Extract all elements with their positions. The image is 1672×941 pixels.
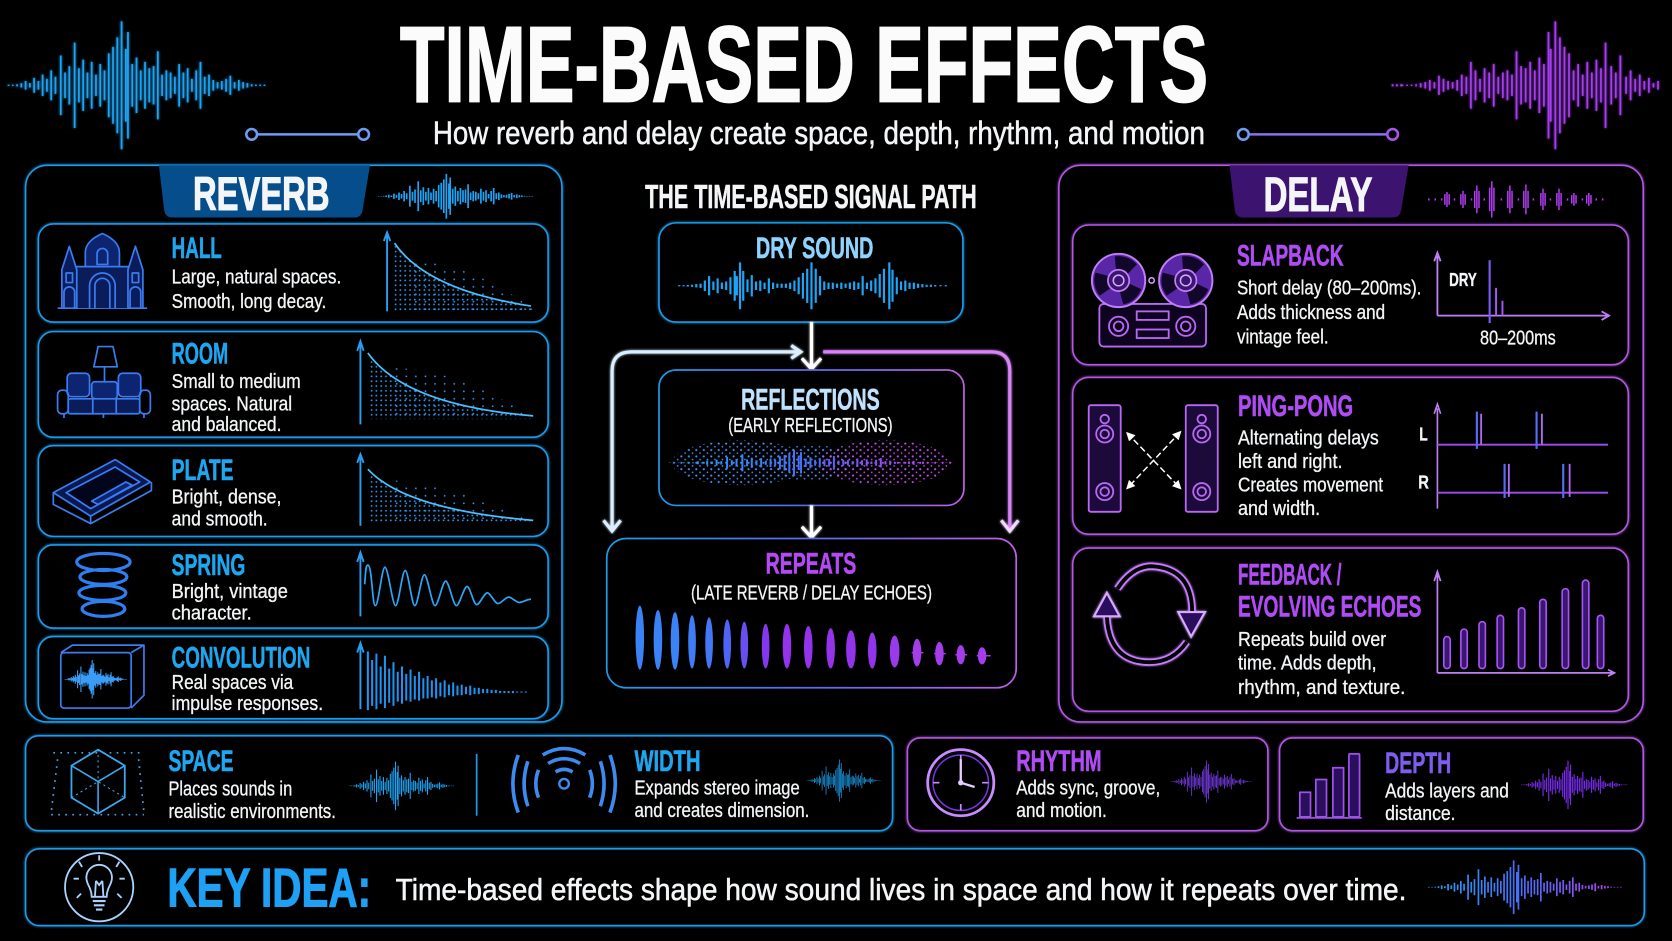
description: spring: character. — [172, 603, 252, 625]
waveform: key idea — [1429, 860, 1621, 914]
panel: reverb — [26, 165, 562, 722]
waveform: top left — [9, 21, 264, 149]
description: spring — [172, 581, 288, 625]
description: hall: Large, natural spaces. — [172, 267, 341, 289]
description: rhythm: and motion. — [1016, 800, 1107, 822]
description: hall: Smooth, long decay. — [172, 291, 326, 313]
description: convolution — [172, 672, 323, 715]
chart: ping-pong: R — [1418, 472, 1429, 492]
waveform: width — [807, 759, 880, 802]
box: repeats: (LATE REVERB / DELAY ECHOES) — [691, 582, 932, 604]
heading: plate: PLATE — [172, 454, 234, 487]
chart: convolution — [357, 643, 526, 710]
waveform: dry — [679, 262, 946, 309]
description: space: Places sounds in — [168, 778, 292, 800]
arrow: reflections to repeats — [802, 505, 821, 537]
card: convolution — [38, 637, 548, 719]
box: dry sound — [659, 223, 963, 322]
description: ping-pong: Alternating delays — [1238, 428, 1379, 450]
icon: convolution — [61, 645, 144, 708]
icon: sofa — [58, 347, 150, 418]
description: ping-pong: and width. — [1238, 498, 1320, 520]
card: room — [38, 332, 548, 437]
description: room — [172, 371, 301, 436]
description: hall — [172, 267, 341, 313]
waveform: reverb header — [379, 174, 532, 219]
description: depth — [1385, 781, 1509, 825]
icon: width — [513, 749, 615, 813]
description: room: Small to medium — [172, 371, 301, 393]
panel: signal path — [604, 179, 1018, 688]
description: slapback: vintage feel. — [1237, 326, 1329, 348]
chart: hall decay — [384, 232, 533, 311]
description: plate: Bright, dense, — [172, 486, 282, 508]
chart: plate decay — [357, 454, 533, 526]
connector: left — [246, 129, 369, 140]
heading: signal path: THE TIME-BASED SIGNAL PATH — [645, 179, 977, 216]
description: room: spaces. Natural — [172, 394, 292, 416]
description: ping-pong: Creates movement — [1238, 475, 1383, 497]
heading: room: ROOM — [172, 338, 228, 371]
description: spring: Bright, vintage — [172, 581, 288, 603]
heading: ping-pong: PING-PONG — [1238, 390, 1353, 423]
heading: feedback: EVOLVING ECHOES — [1238, 590, 1421, 623]
heading: convolution: CONVOLUTION — [172, 642, 310, 675]
heading: width: WIDTH — [634, 745, 701, 778]
arrow: right route — [823, 352, 1018, 531]
icon: plate — [53, 460, 151, 524]
heading: slapback: SLAPBACK — [1237, 240, 1344, 273]
heading: feedback — [1238, 558, 1421, 623]
description: rhythm: Adds sync, groove, — [1016, 777, 1160, 799]
chart: ping-pong: L — [1419, 424, 1428, 444]
card: slapback — [1073, 225, 1628, 365]
card: hall — [38, 224, 548, 322]
chart: slapback: 80–200ms — [1480, 327, 1556, 349]
description: slapback: Short delay (80–200ms). — [1237, 277, 1421, 299]
description: width: and creates dimension. — [634, 800, 809, 822]
key idea sentence: Time-based effects shape how sound lives in space and how it repeats over time. — [396, 872, 1406, 907]
chart: spring — [357, 552, 531, 616]
box: reflections: (EARLY REFLECTIONS) — [728, 415, 893, 437]
panel: space and width — [26, 736, 893, 831]
key idea label: KEY IDEA: — [167, 857, 371, 918]
box: repeats — [607, 538, 1016, 688]
icon: hall — [58, 234, 147, 308]
box: dry sound: DRY SOUND — [756, 232, 873, 265]
description: slapback — [1237, 277, 1421, 348]
description: feedback: time. Adds depth, — [1238, 653, 1377, 675]
divider — [476, 754, 478, 816]
panel frame: delay — [1059, 165, 1643, 722]
icon: cube — [51, 750, 144, 815]
description: width — [634, 777, 809, 822]
card: feedback — [1073, 548, 1628, 711]
subtitle: How reverb and delay create space, depth, rhythm, and motion — [433, 115, 1205, 151]
description: ping-pong: left and right. — [1238, 451, 1343, 473]
description: space — [168, 778, 336, 823]
connector: right — [1238, 129, 1398, 140]
waveform: delay header — [1429, 181, 1603, 218]
echo bars — [636, 606, 991, 670]
description: feedback: rhythm, and texture. — [1238, 677, 1405, 699]
card: plate — [38, 446, 548, 536]
box: reflections: REFLECTIONS — [741, 383, 880, 416]
card: ping-pong — [1073, 377, 1628, 534]
description: convolution: impulse responses. — [172, 693, 323, 715]
heading: depth: DEPTH — [1385, 747, 1451, 780]
icon: light bulb — [65, 853, 133, 921]
icon: clock — [928, 750, 994, 816]
description: feedback — [1238, 629, 1405, 699]
description: depth: distance. — [1385, 803, 1456, 825]
header tab: delay: DELAY — [1264, 169, 1372, 222]
panel: delay — [1059, 165, 1643, 722]
description: slapback: Adds thickness and — [1237, 302, 1385, 324]
arrow: dry to reflections — [802, 322, 821, 369]
description: depth: Adds layers and — [1385, 781, 1509, 803]
panel: rhythm — [907, 738, 1268, 831]
description: width: Expands stereo image — [634, 777, 800, 799]
arrow: left route — [604, 345, 801, 531]
chart: room decay — [357, 341, 533, 424]
box: reflections — [659, 370, 964, 505]
heading: feedback: FEEDBACK / — [1238, 558, 1341, 591]
panel frame: reverb — [26, 165, 562, 722]
card: spring — [38, 545, 548, 628]
waveform: depth — [1522, 761, 1627, 809]
heading: hall: HALL — [172, 232, 222, 265]
waveform: reflections — [670, 440, 952, 485]
box: repeats: REPEATS — [766, 548, 856, 581]
heading: space: SPACE — [168, 745, 234, 778]
heading: rhythm: RHYTHM — [1016, 745, 1102, 778]
description: plate: and smooth. — [172, 509, 268, 531]
icon: feedback loop — [1094, 566, 1205, 662]
heading: spring: SPRING — [172, 549, 245, 582]
header tab: reverb: REVERB — [193, 168, 329, 220]
icon: spring — [77, 553, 130, 616]
description: room: and balanced. — [172, 414, 282, 436]
description: rhythm — [1016, 777, 1160, 822]
panel: key idea — [26, 849, 1644, 926]
icon: speakers — [1089, 405, 1218, 512]
waveform: rhythm — [1171, 761, 1251, 803]
description: convolution: Real spaces via — [172, 672, 294, 694]
description: plate — [172, 486, 282, 531]
description: feedback: Repeats build over — [1238, 629, 1386, 651]
icon: tape machine — [1092, 254, 1212, 347]
chart: slapback — [1434, 253, 1609, 349]
waveform: space — [350, 762, 453, 810]
description: ping-pong — [1238, 428, 1383, 520]
chart: feedback — [1434, 572, 1614, 676]
panel: depth — [1280, 738, 1643, 831]
title: TIME-BASED EFFECTS — [400, 4, 1208, 124]
icon: depth bars — [1297, 754, 1362, 818]
chart: slapback: DRY — [1449, 270, 1477, 290]
waveform: top right — [1393, 21, 1672, 149]
chart: ping-pong — [1418, 404, 1608, 509]
description: space: realistic environments. — [168, 801, 336, 823]
